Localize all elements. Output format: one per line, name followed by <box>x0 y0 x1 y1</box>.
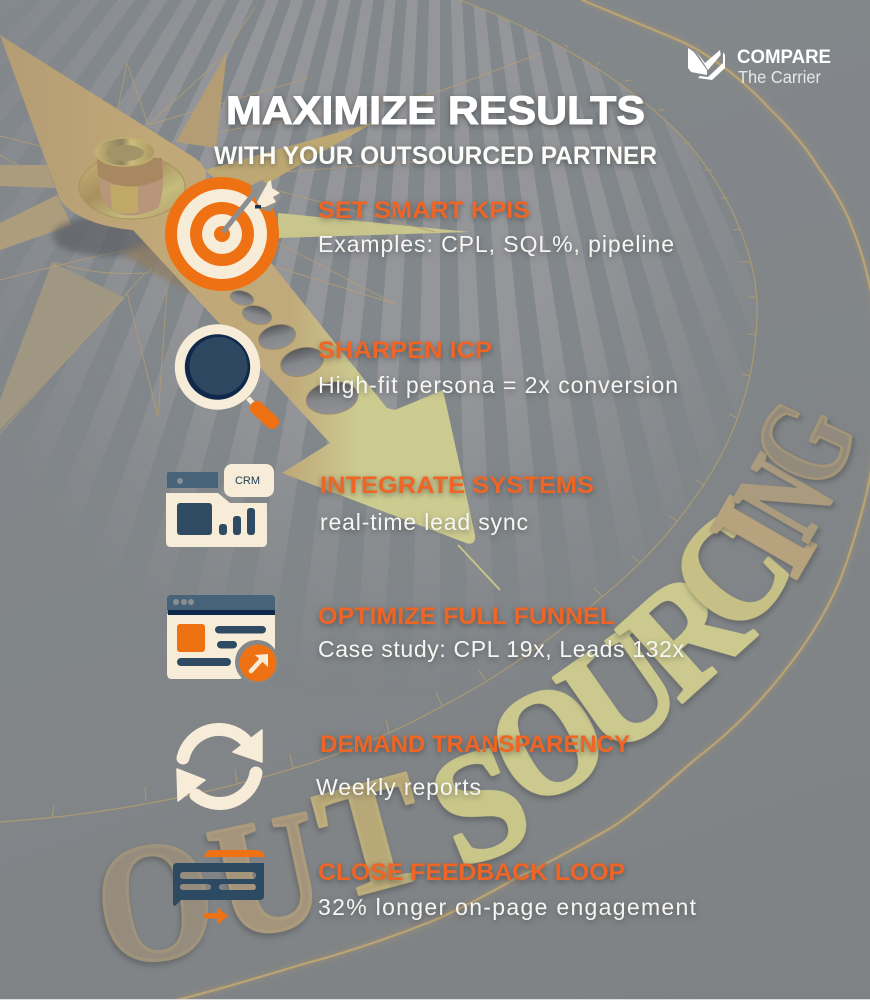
logo mark <box>688 48 725 80</box>
icon: target with dart <box>165 177 282 291</box>
icon: browser funnel window <box>167 595 279 684</box>
icon: sync arrows <box>177 729 262 803</box>
item 6: close feedback loop <box>318 859 697 920</box>
curved lettering: OUTSOURCING: O <box>84 800 226 1000</box>
item 2: sharpen ICP: High-fit persona = 2x conversion <box>318 372 678 398</box>
item 2: sharpen ICP <box>318 337 678 398</box>
item 3: integrate systems: real-time lead sync <box>320 509 528 535</box>
outer gold arc <box>177 0 870 1000</box>
compass needle <box>0 35 500 590</box>
item 5: demand transparency: Weekly reports <box>316 774 481 800</box>
item 3: integrate systems: INTEGRATE SYSTEMS <box>320 472 594 499</box>
title <box>214 89 657 170</box>
subtitle: WITH YOUR OUTSOURCED PARTNER <box>214 142 657 170</box>
item 1: set smart KPIs: Examples: CPL, SQL%, pipeline <box>318 231 674 257</box>
icon: CRM dashboard <box>166 464 274 547</box>
background: radiating compass stripes <box>71 0 698 558</box>
curved lettering: OUTSOURCING: T <box>300 736 444 934</box>
item 6: close feedback loop: CLOSE FEEDBACK LOOP <box>318 859 625 886</box>
curved lettering: OUTSOURCING: U <box>196 774 339 975</box>
curved lettering: OUTSOURCING <box>84 381 870 1000</box>
item 2: sharpen ICP: SHARPEN ICP <box>318 337 492 364</box>
item 1: set smart KPIs <box>318 197 674 257</box>
icon: feedback message <box>173 850 265 925</box>
curved lettering: OUTSOURCING: O <box>462 643 633 839</box>
icon: magnifier <box>175 324 272 422</box>
compass pivot cap <box>79 138 185 219</box>
logo wordmark: COMPARE <box>737 47 831 68</box>
item 3: integrate systems <box>320 472 594 535</box>
curved lettering: OUTSOURCING: R <box>591 536 779 729</box>
item 4: optimize full funnel <box>318 603 684 662</box>
needle holes <box>229 288 360 417</box>
curved lettering: OUTSOURCING: U <box>530 592 710 787</box>
curved lettering: OUTSOURCING: I <box>680 476 846 599</box>
title: MAXIMIZE RESULTS <box>226 89 645 133</box>
item 6: close feedback loop: 32% longer on-page engagement <box>318 894 697 920</box>
item 1: set smart KPIs: SET SMART KPIS <box>318 197 530 224</box>
item 4: optimize full funnel: OPTIMIZE FULL FUNNEL <box>318 603 615 630</box>
arc with tick marks <box>0 0 757 822</box>
curved lettering: OUTSOURCING: N <box>708 437 861 559</box>
logo: The Carrier <box>738 67 821 87</box>
curved lettering: OUTSOURCING: C <box>637 485 823 662</box>
item 4: optimize full funnel: Case study: CPL 19x, Leads 132x <box>318 636 684 662</box>
curved lettering: OUTSOURCING: S <box>407 709 552 901</box>
item 5: demand transparency: DEMAND TRANSPARENCY <box>320 731 630 758</box>
icon: CRM dashboard: CRM <box>235 475 260 487</box>
compass rose spikes <box>0 7 542 433</box>
logo <box>688 47 831 87</box>
item 5: demand transparency <box>316 731 630 800</box>
